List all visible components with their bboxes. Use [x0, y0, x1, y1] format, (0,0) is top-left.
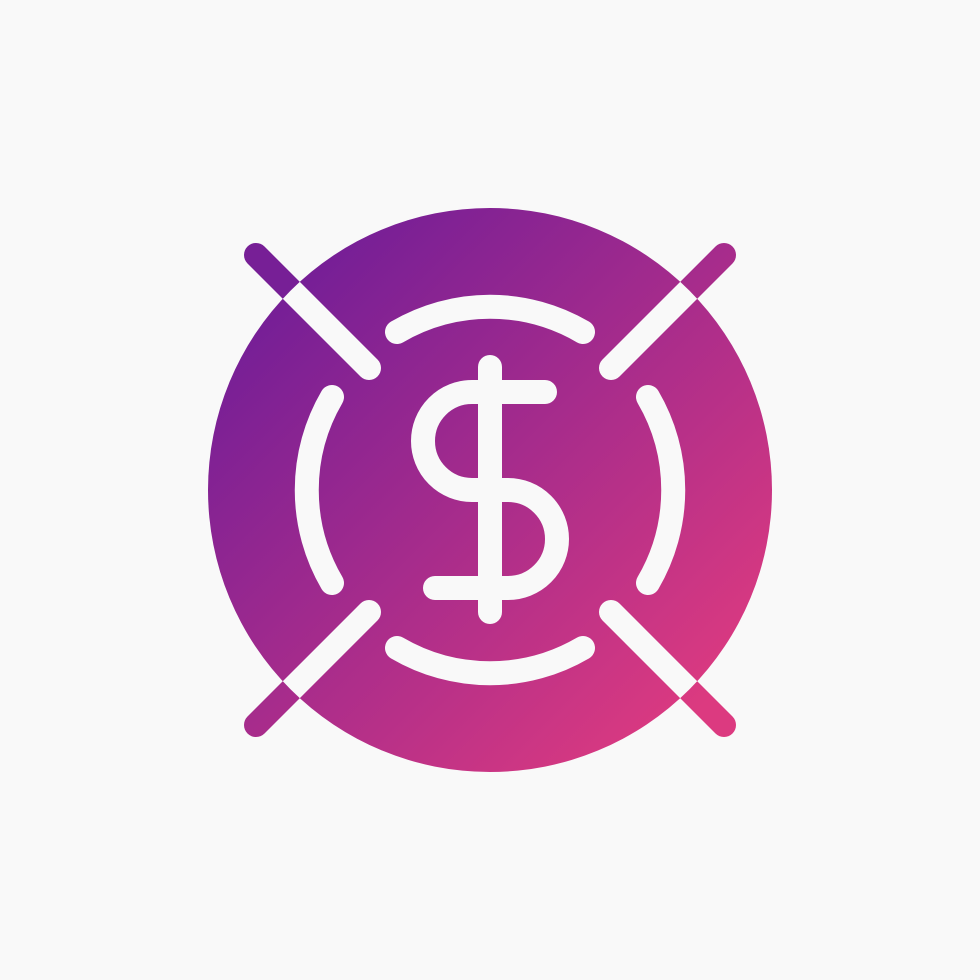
target ring arcs	[307, 307, 673, 673]
crosshair ticks outside the coin	[256, 255, 724, 725]
icon: dollar target	[208, 208, 772, 772]
dollar sign	[423, 367, 557, 612]
crosshair ticks inside the coin	[282, 282, 698, 698]
coin circle	[208, 208, 772, 772]
